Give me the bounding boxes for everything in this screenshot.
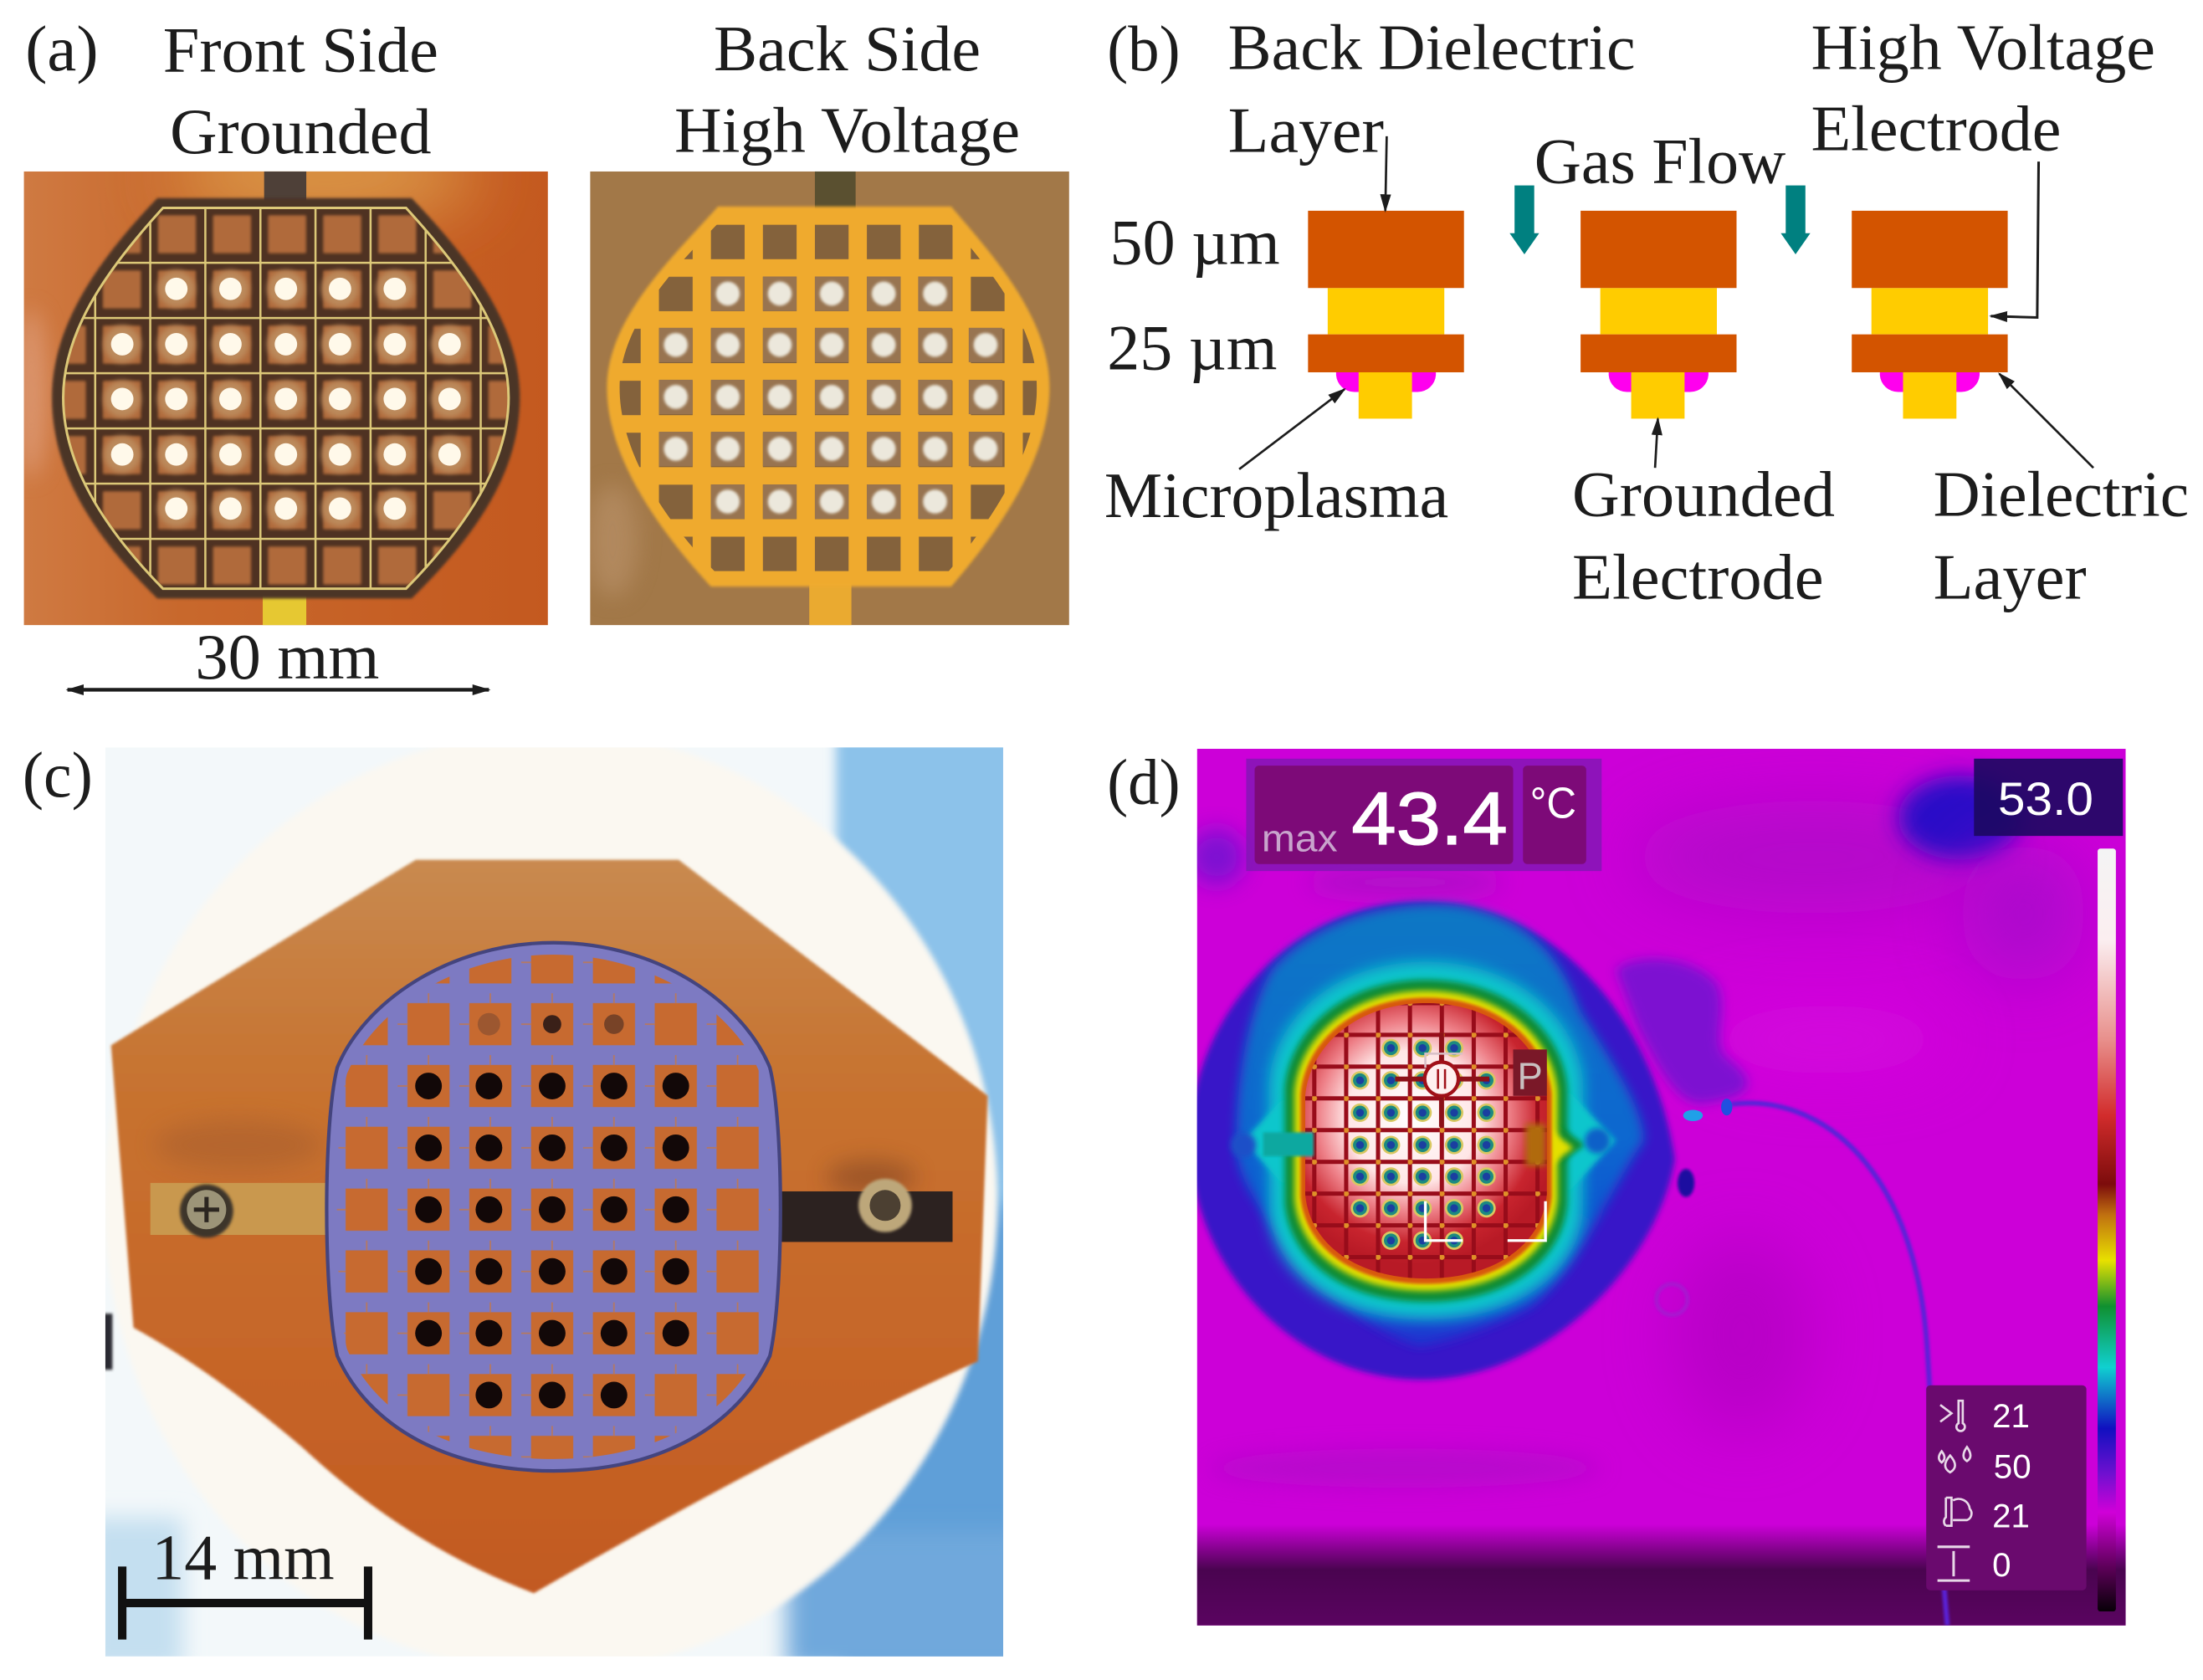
value: 0: 0 bbox=[1992, 1546, 2011, 1584]
electrode stack 3 bbox=[1852, 211, 2008, 418]
label: grounded: Grounded bbox=[1572, 458, 1835, 530]
photo: device on holder bbox=[85, 730, 1032, 1672]
label: 25 um: 25 µm bbox=[1107, 312, 1277, 384]
icon: reflected temperature bbox=[1940, 1401, 1965, 1431]
label: layer: Layer bbox=[1228, 94, 1384, 166]
text: degrees C: °C bbox=[1530, 779, 1576, 827]
value: 21: 21 bbox=[1992, 1497, 2030, 1534]
icon: ambient temperature bbox=[1944, 1498, 1971, 1526]
scale bar bbox=[122, 1566, 368, 1640]
thermal photo bbox=[1189, 749, 2126, 1626]
heading: grounded: Grounded bbox=[170, 95, 432, 167]
icon: humidity bbox=[1939, 1447, 1970, 1473]
electrode stack 1 bbox=[1308, 211, 1464, 418]
photo: back side electrode bbox=[587, 172, 1069, 625]
arrow: high voltage electrode bbox=[1990, 161, 2039, 318]
arrow: gas flow left bbox=[1509, 186, 1540, 254]
label: microplasma: Microplasma bbox=[1104, 459, 1448, 531]
arrow: 30 mm dimension bbox=[68, 689, 489, 691]
max temperature box bbox=[1246, 759, 1601, 871]
heading: front side: Front Side bbox=[163, 14, 438, 86]
arrow: grounded electrode bbox=[1655, 418, 1657, 468]
panel b: cross-section schematic bbox=[1104, 11, 2189, 612]
label: gas flow: Gas Flow bbox=[1534, 125, 1785, 197]
label: back dielectric: Back Dielectric bbox=[1228, 11, 1636, 83]
scale label: 14 mm: 14 mm bbox=[151, 1521, 335, 1593]
settings legend box bbox=[1926, 1385, 2087, 1590]
panel c: mounted device photo bbox=[23, 730, 1032, 1672]
label (b): (b) bbox=[1107, 13, 1181, 85]
value: 21: 21 bbox=[1992, 1397, 2030, 1435]
text: 53.0: 53.0 bbox=[1998, 773, 2093, 825]
icon: distance bbox=[1938, 1547, 1970, 1580]
electrode stack 2 bbox=[1581, 211, 1737, 418]
arrow: dielectric layer bbox=[2000, 374, 2093, 468]
label: high voltage: High Voltage bbox=[1811, 11, 2155, 83]
label (a): (a) bbox=[25, 13, 99, 85]
text: max: max bbox=[1262, 817, 1338, 860]
text: 43.4: 43.4 bbox=[1351, 776, 1508, 860]
panel d: thermal image bbox=[1107, 746, 2126, 1626]
arrow: gas flow right bbox=[1780, 186, 1811, 254]
label: 50 um: 50 µm bbox=[1110, 207, 1280, 279]
label (d): (d) bbox=[1107, 746, 1181, 818]
P marker: P bbox=[1518, 1054, 1543, 1097]
label: layer: Layer bbox=[1934, 540, 2087, 612]
label: electrode: Electrode bbox=[1811, 93, 2061, 165]
arrow: microplasma bbox=[1239, 389, 1345, 469]
heading: back side: Back Side bbox=[714, 13, 981, 85]
panel a: front and back photos bbox=[14, 13, 1069, 693]
label (c): (c) bbox=[23, 739, 93, 811]
label: electrode: Electrode bbox=[1572, 540, 1824, 612]
label: dielectric: Dielectric bbox=[1934, 458, 2189, 530]
value: 50: 50 bbox=[1994, 1448, 2031, 1486]
color scale bar bbox=[2098, 848, 2116, 1611]
photo: front side electrode bbox=[14, 134, 548, 625]
heading: high voltage: High Voltage bbox=[674, 94, 1020, 166]
scale label: 30 mm: 30 mm bbox=[195, 621, 379, 693]
scale max box bbox=[1974, 759, 2123, 836]
